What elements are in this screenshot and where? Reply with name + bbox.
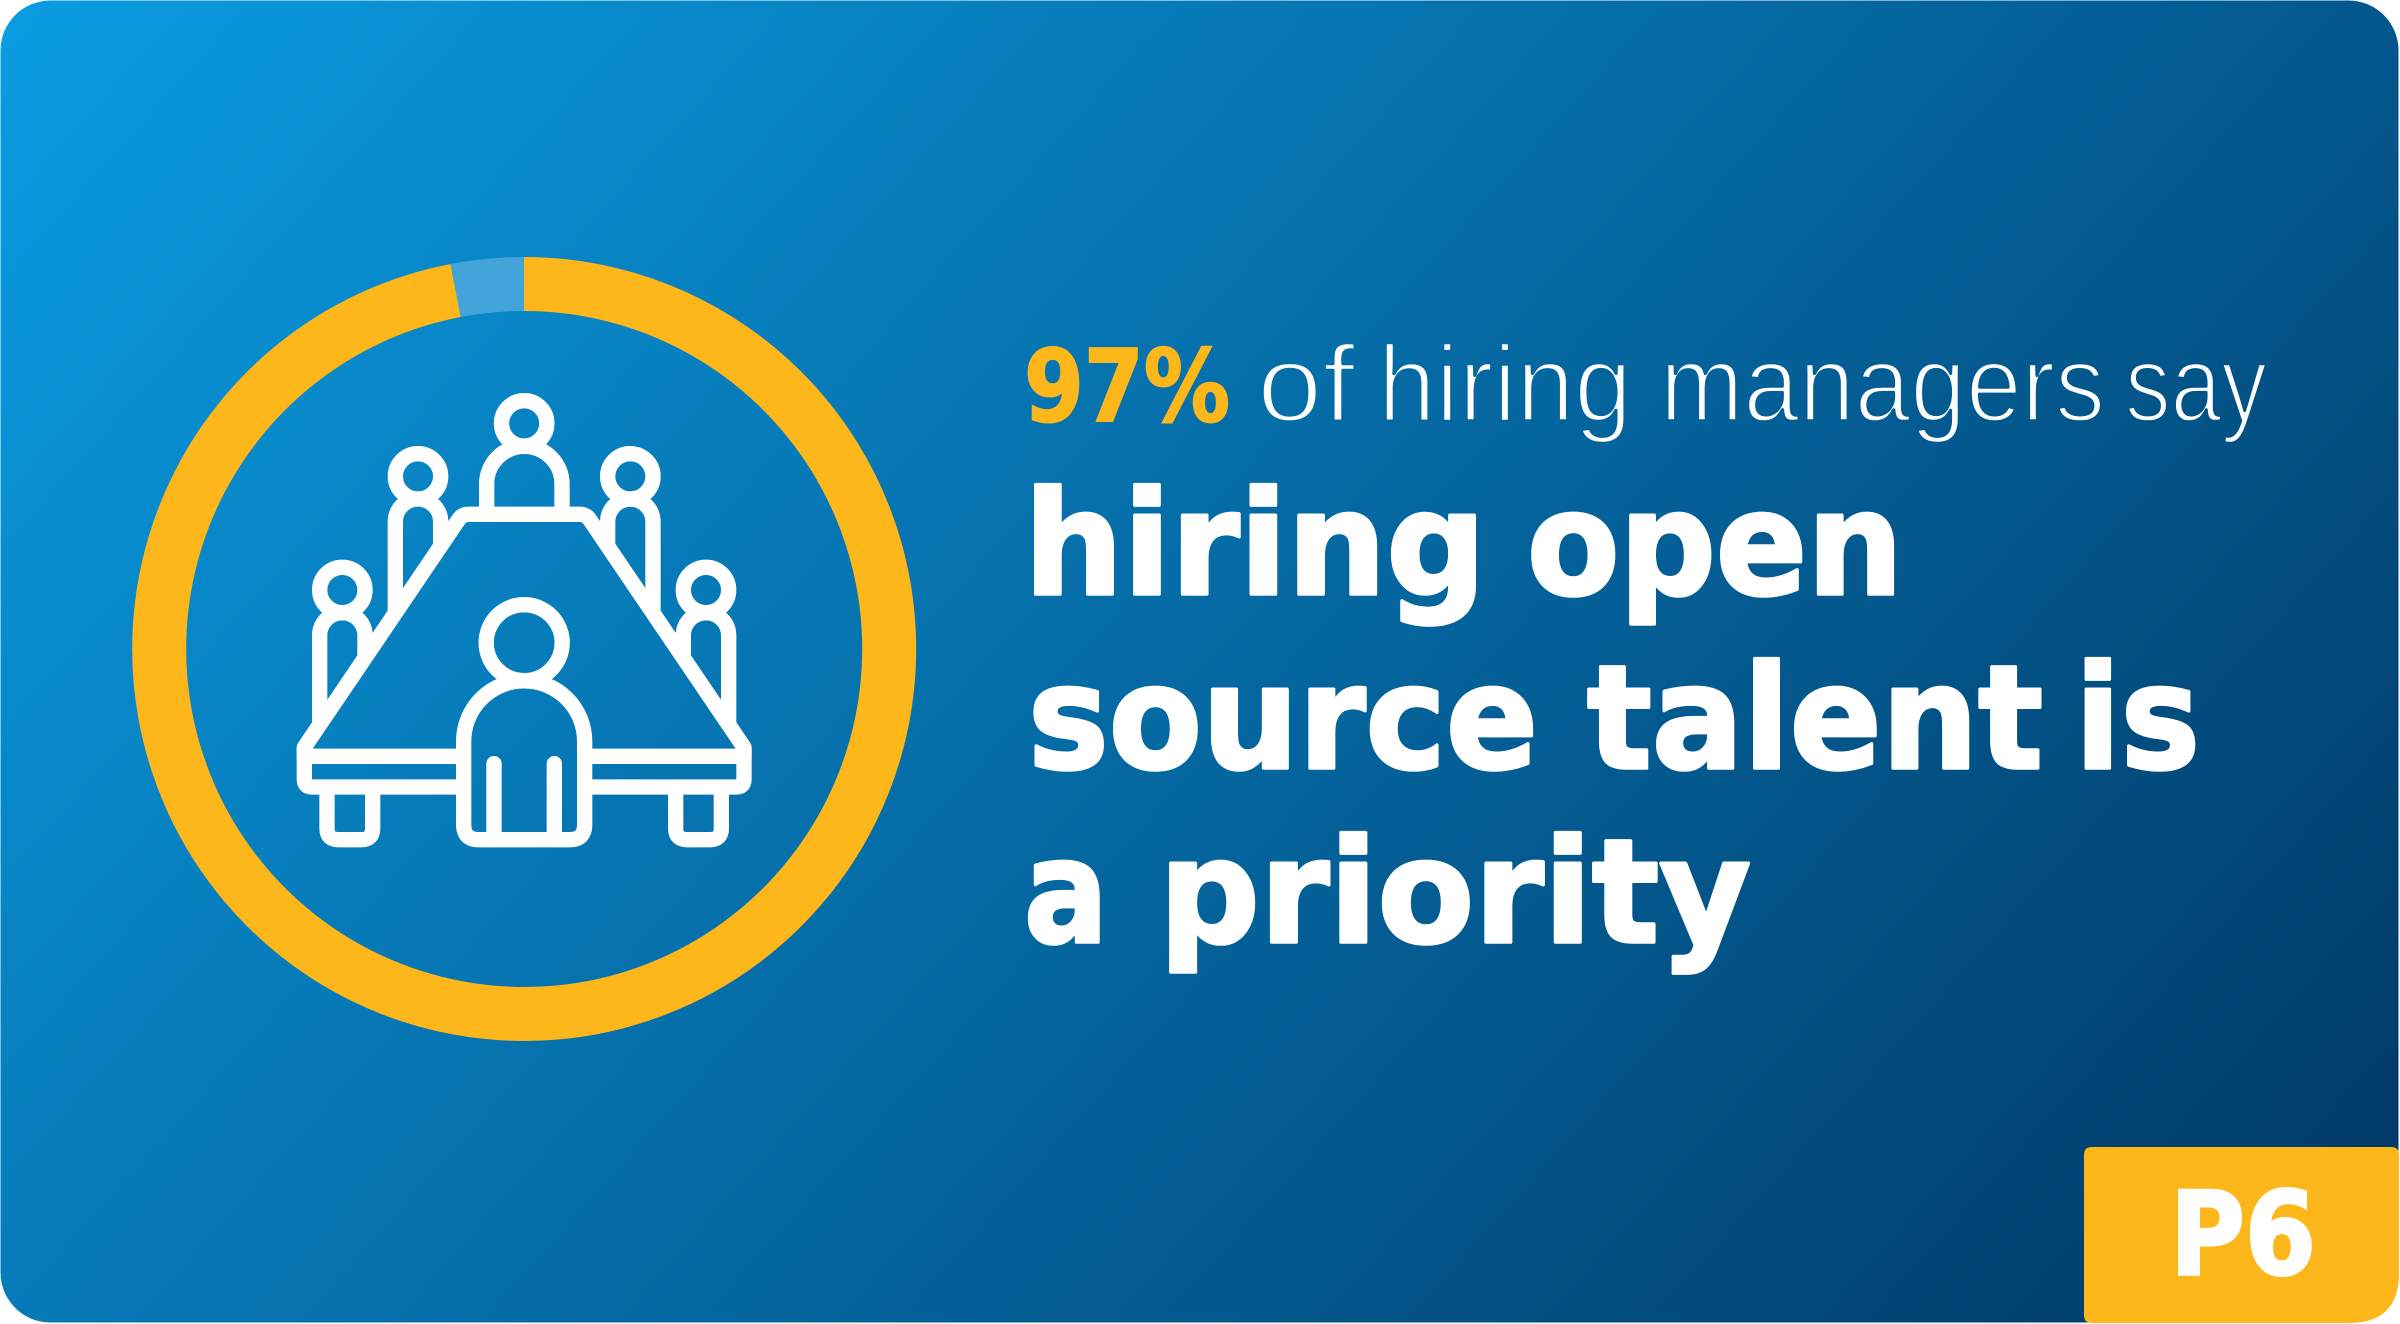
heading: hiring open source talent is a priority: talent xyxy=(1587,634,2043,802)
icon: meeting table with people xyxy=(304,401,744,840)
page badge: P6 xyxy=(2084,1147,2399,1323)
stat line: 97% of hiring managers say xyxy=(1024,323,2267,445)
stat line: 97% of hiring managers say: 97% xyxy=(1024,328,1230,445)
heading: hiring open source talent is a priority: hiring xyxy=(1024,460,1486,628)
donut chart: 97 percent ring xyxy=(159,284,889,1014)
stat line: 97% of hiring managers say: of xyxy=(1257,323,1356,445)
stat line: 97% of hiring managers say: hiring xyxy=(1378,323,1632,445)
page badge: P6: P6 xyxy=(2170,1168,2316,1302)
heading: hiring open source talent is a priority: source xyxy=(1028,634,1538,802)
heading: hiring open source talent is a priority: is xyxy=(2075,634,2200,802)
stat line: 97% of hiring managers say: managers xyxy=(1660,323,2105,445)
heading: hiring open source talent is a priority: a xyxy=(1024,808,1108,976)
heading: hiring open source talent is a priority: open xyxy=(1527,460,1903,628)
stat line: 97% of hiring managers say: say xyxy=(2125,323,2267,445)
heading: hiring open source talent is a priority: priority xyxy=(1159,808,1751,976)
heading: hiring open source talent is a priority xyxy=(1024,460,2200,976)
